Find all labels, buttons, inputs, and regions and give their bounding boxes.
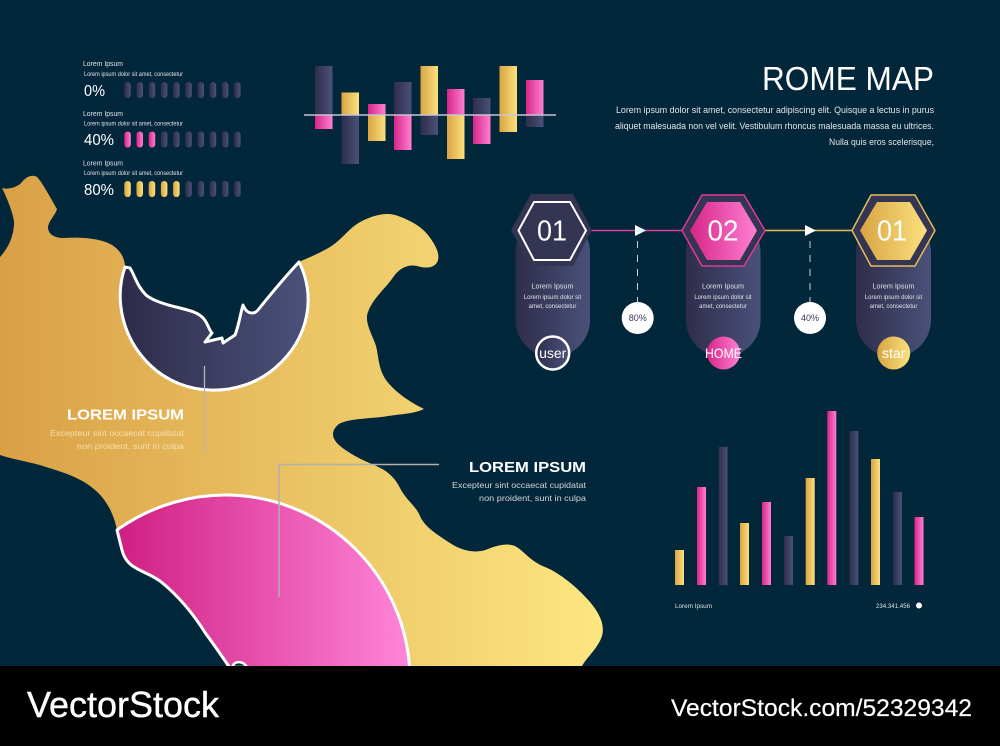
diverging bar chart: [304, 66, 556, 164]
panel: progress rows: [83, 61, 241, 199]
step card 1: user: user: [539, 345, 567, 361]
step card 3: star: Lorem Ipsum: [873, 282, 914, 290]
progress row 0%: Lorem ipsum dolor sit amet, consectetur: [84, 71, 183, 78]
callout text: left: [50, 406, 185, 451]
step card 2: home: HOME: [705, 345, 742, 361]
step card 2: home: Lorem ipsum dolor sit: [694, 295, 752, 301]
step card 1: user: 01: [537, 216, 567, 248]
progress row 0%: 0%: [84, 83, 105, 100]
progress row 80%: Lorem Ipsum: [83, 160, 123, 168]
step card 3: star: Lorem ipsum dolor sit: [865, 295, 923, 301]
intro paragraph: aliquet malesuada non vel velit. Vestibulum rhoncus malesuada massa eu ultrices.: [615, 121, 934, 131]
callout text: centre: LOREM IPSUM: [469, 459, 586, 476]
pink district: [117, 495, 410, 680]
dark district: [120, 262, 308, 390]
progress row 40%: [83, 111, 241, 149]
watermark bar: VectorStock.com/52329342: [671, 695, 972, 722]
step card 3: star: star: [882, 345, 906, 361]
chart caption: 234.341.456: [876, 603, 910, 610]
connector: pink arrow and 80%: 80%: [629, 313, 647, 323]
callout line: centre: [279, 464, 439, 597]
map of Rome region: [0, 176, 603, 680]
watermark bar: [0, 666, 1000, 746]
connector: gold arrow and 40%: 40%: [801, 313, 819, 323]
callout text: left: LOREM IPSUM: [67, 406, 184, 424]
title: ROME MAP: [762, 60, 934, 97]
intro paragraph: Nulla quis eros scelerisque,: [829, 137, 934, 147]
vertical bar chart: [675, 411, 924, 585]
callout text: centre: Excepteur sint occaecat cupidatat: [452, 480, 587, 490]
step card 2: home: Lorem Ipsum: [702, 282, 744, 290]
progress row 0%: Lorem Ipsum: [83, 61, 123, 68]
callout line: left: [204, 366, 206, 453]
step card 3: star: [852, 195, 935, 370]
step card 1: user: [511, 194, 592, 370]
progress row 80%: Lorem ipsum dolor sit amet, consectetur: [84, 170, 183, 177]
progress row 40%: Lorem ipsum dolor sit amet, consectetur: [84, 120, 183, 128]
progress row 80%: [83, 160, 241, 199]
step card 1: user: Lorem Ipsum: [532, 282, 573, 290]
progress row 40%: Lorem Ipsum: [83, 111, 123, 118]
progress row 40%: 40%: [84, 132, 114, 149]
step card 1: user: amet, consectetur: [529, 304, 576, 310]
callout text: left: non proident, sunt in culpa: [77, 441, 184, 451]
step card 3: star: 01: [877, 216, 907, 248]
intro paragraph: Lorem ipsum dolor sit amet, consectetur adipiscing elit. Quisque a lectus in purus: [616, 105, 934, 115]
intro paragraph: [615, 105, 934, 147]
progress row 0%: [83, 61, 241, 100]
connector: gold arrow and 40%: [763, 225, 853, 334]
callout text: centre: non proident, sunt in culpa: [479, 493, 586, 503]
chart caption: Lorem Ipsum: [675, 603, 712, 610]
step card 2: home: [682, 195, 765, 370]
progress row 80%: 80%: [84, 182, 114, 199]
connector: pink arrow and 80%: [590, 225, 683, 334]
callout text: centre: [452, 459, 587, 503]
watermark bar: VectorStock: [27, 684, 220, 725]
step card 3: star: amet, consectetur: [870, 304, 917, 310]
callout text: left: Excepteur sint occaecat cupidatat: [50, 428, 185, 438]
chart caption: [675, 602, 922, 610]
step card 2: home: amet, consectetur: [699, 304, 747, 310]
step card 2: home: 02: [708, 216, 738, 248]
step card 1: user: Lorem ipsum dolor sit: [524, 295, 582, 301]
